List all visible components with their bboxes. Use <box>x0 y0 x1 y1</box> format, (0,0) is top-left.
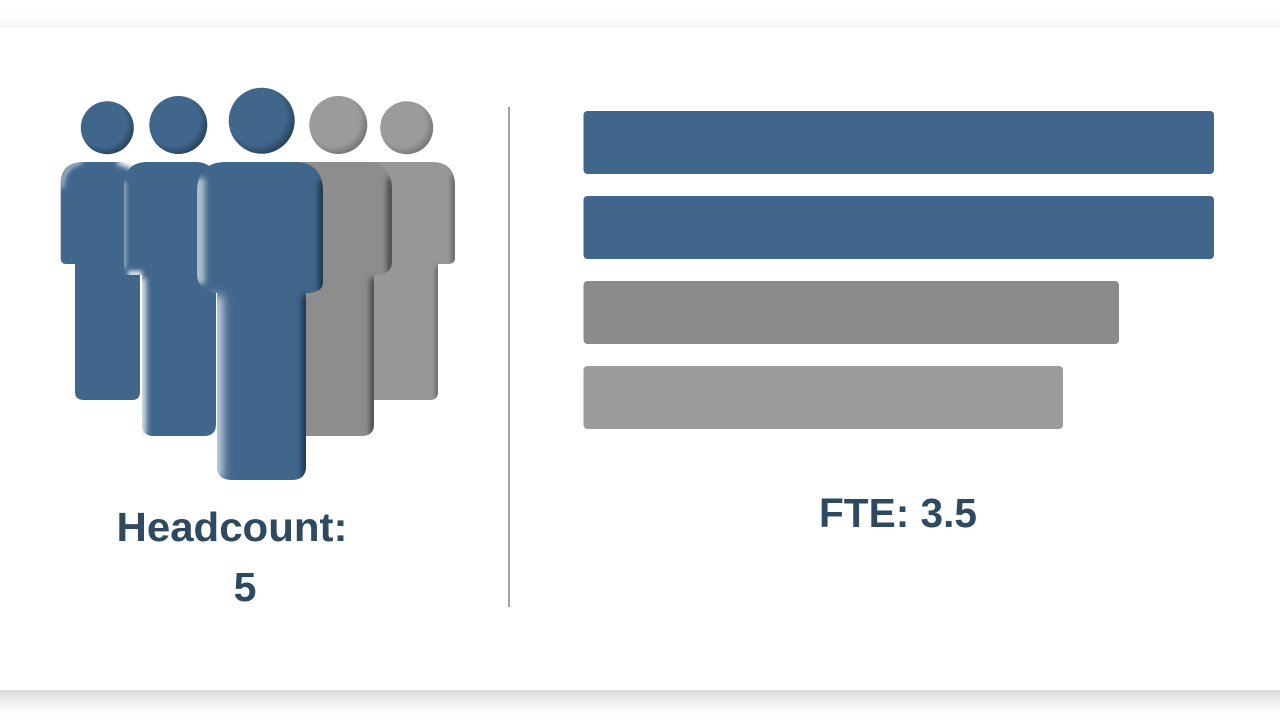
highlight on shoulders <box>62 160 142 188</box>
bar 3 part time <box>584 281 1119 344</box>
bar chart: FTE bars <box>584 111 1214 429</box>
bar 2 full time <box>584 196 1214 259</box>
person 5 (grey) <box>360 101 455 400</box>
heading: FTE label: FTE: 3.5 <box>819 490 977 536</box>
person 1 (blue) <box>61 101 142 400</box>
heading: headcount label: Headcount: <box>116 504 348 550</box>
person 2 (blue) <box>124 96 216 436</box>
icon: group of five people <box>61 88 455 480</box>
bar 1 full time <box>584 111 1214 174</box>
person 3 (front, blue) <box>197 88 323 480</box>
person 4 (grey) <box>285 96 392 436</box>
heading: headcount label: 5 <box>234 564 256 610</box>
bar 4 part time <box>584 366 1063 429</box>
top shadow band <box>0 13 1280 28</box>
vertical divider <box>508 107 510 607</box>
highlight on left edge <box>124 182 142 436</box>
heading: headcount label <box>116 504 348 610</box>
edge shading <box>198 178 323 480</box>
bottom shadow band <box>0 690 1280 714</box>
